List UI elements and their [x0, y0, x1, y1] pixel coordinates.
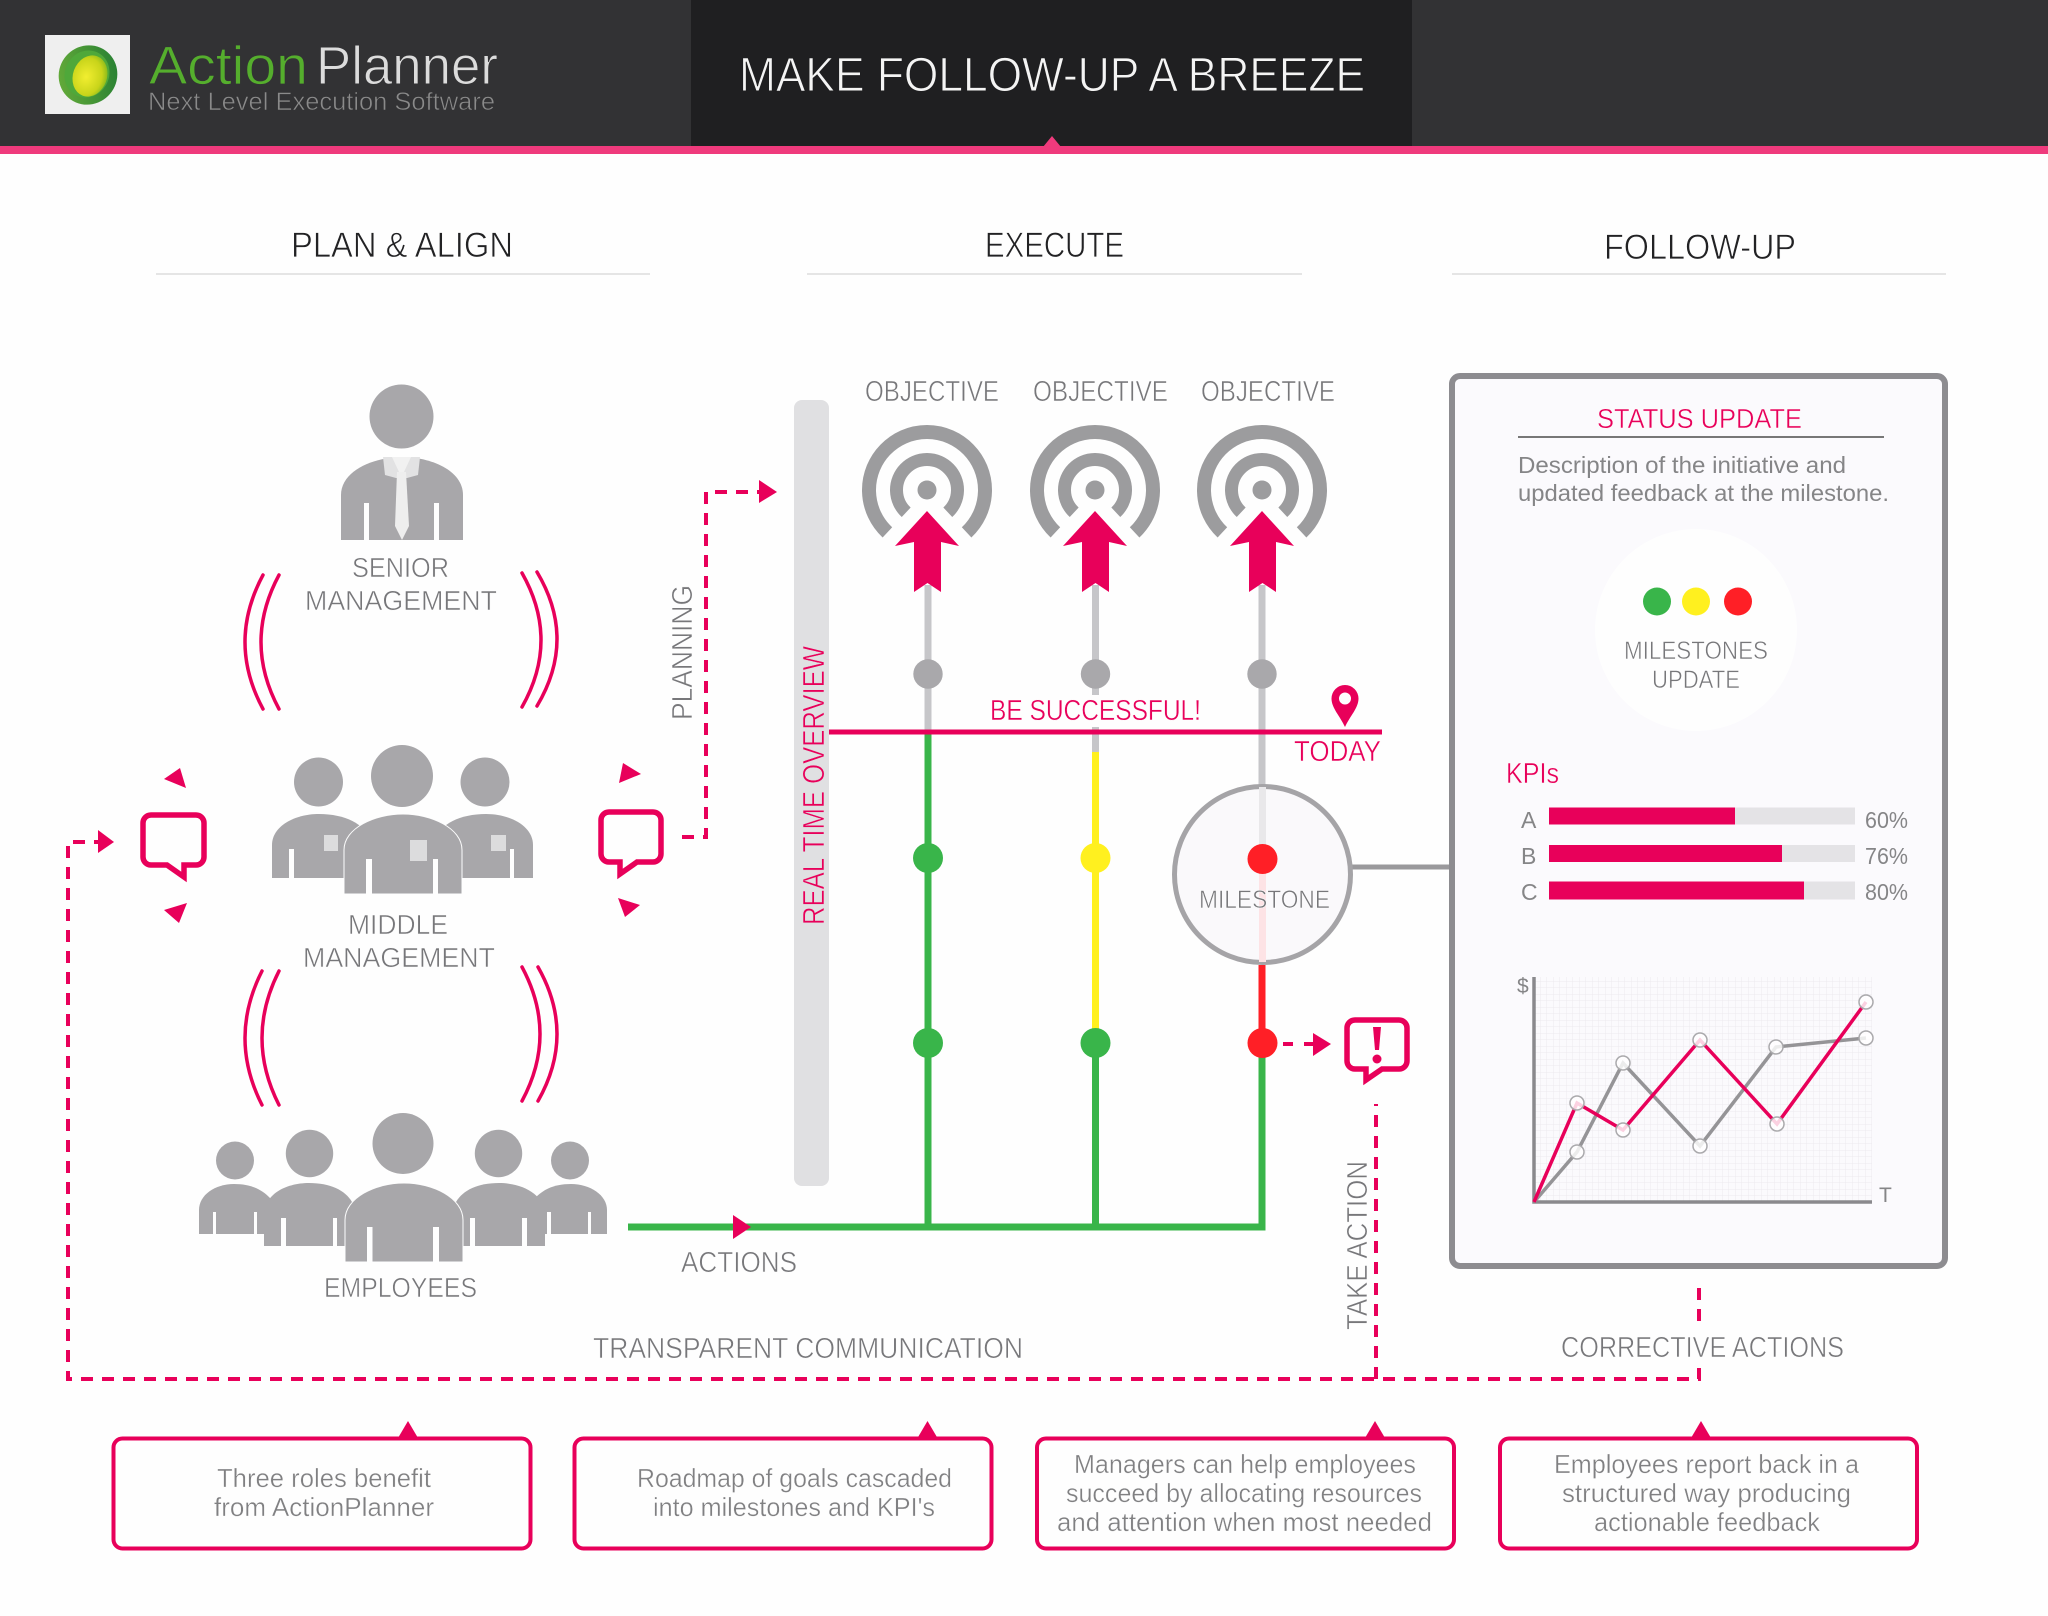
icon: employees group [199, 1113, 607, 1262]
heading: follow-up: FOLLOW-UP [1604, 228, 1796, 267]
icon: middle management group [272, 745, 533, 894]
callout: employees report: actionable feedback [1594, 1507, 1821, 1537]
status description [1518, 452, 1889, 506]
label: corrective actions: CORRECTIVE ACTIONS [1561, 1332, 1844, 1364]
callout: employees report [1500, 1421, 1917, 1548]
icon: senior management person [341, 384, 463, 540]
callout: three roles: from ActionPlanner [214, 1492, 434, 1522]
label: take action: TAKE ACTION [1342, 1161, 1374, 1330]
label: milestone: MILESTONE [1199, 886, 1330, 914]
brackets: middle to employees [245, 967, 557, 1105]
callout: roadmap: Roadmap of goals cascaded [637, 1463, 952, 1493]
label: senior management: MANAGEMENT [305, 585, 497, 616]
callout: three roles: Three roles benefit [217, 1463, 432, 1493]
status description: Description of the initiative and [1518, 452, 1846, 478]
callout: employees report: Employees report back in a [1554, 1449, 1860, 1479]
status description: updated feedback at the milestone. [1518, 480, 1889, 506]
label: actions: ACTIONS [681, 1247, 797, 1279]
track: objective 2 green [1092, 1042, 1099, 1230]
label: employees: EMPLOYEES [324, 1272, 477, 1303]
callout: managers: Managers can help employees [1074, 1449, 1416, 1479]
track: objective 2 yellow [1092, 752, 1099, 1042]
callout: managers: succeed by allocating resources [1066, 1478, 1422, 1508]
label: planning: PLANNING [667, 585, 699, 720]
KPI bar chart: C [1521, 879, 1538, 905]
arrow: transparent communication dashed loop [68, 830, 1699, 1379]
milestone circle [1174, 786, 1350, 962]
logo tagline: Next Level Execution Software [148, 88, 495, 116]
horizontal actions line [628, 1224, 1266, 1230]
milestones update badge: MILESTONES [1624, 637, 1768, 665]
line chart: T [1879, 1184, 1892, 1207]
callout: roadmap: into milestones and KPI's [653, 1492, 935, 1522]
label: be successful: BE SUCCESSFUL! [990, 695, 1201, 727]
label: middle management: MIDDLE [348, 909, 448, 940]
callout: managers [1037, 1421, 1454, 1548]
connector: milestone to status panel [1350, 864, 1452, 870]
arrow: planning dashed connector [682, 480, 777, 837]
logo wordmark second part: Planner [316, 36, 498, 96]
icon: target 2 [1037, 432, 1153, 592]
objective stems [924, 585, 1266, 785]
label: real time overview: REAL TIME OVERVIEW [796, 645, 831, 925]
KPI bar chart: A [1521, 807, 1537, 833]
header pointer [1043, 136, 1061, 147]
icon: target 1 [869, 432, 985, 592]
track: objective 1 green [924, 734, 932, 1230]
icon: today pin [1332, 685, 1358, 727]
callout: employees report: structured way producing [1562, 1478, 1851, 1508]
arrow: objective 2 [1063, 511, 1127, 592]
KPI bar chart: 76% [1865, 843, 1908, 869]
status update heading: STATUS UPDATE [1597, 403, 1802, 434]
line chart: $ [1517, 975, 1529, 998]
label: objectives [865, 376, 1335, 408]
KPI bar chart [1521, 807, 1908, 905]
arrow: objective 1 [895, 511, 959, 592]
track: objective 3 green [1258, 1050, 1266, 1230]
line chart [1517, 975, 1892, 1207]
arrow: take action dashed line [1374, 1104, 1378, 1379]
logo wordmark: Action [149, 36, 308, 96]
header bar [0, 0, 2048, 154]
label: senior management: SENIOR [352, 552, 449, 583]
icon: left speech bubble with arrows [143, 768, 204, 923]
label: transparent communication: TRANSPARENT COMMUNICATION [593, 1333, 1023, 1365]
arrow: objective 3 [1230, 511, 1294, 592]
label: today: TODAY [1294, 736, 1381, 768]
arrow: dashed to alert [1283, 1033, 1331, 1056]
label: middle management: MANAGEMENT [303, 942, 495, 973]
label: objectives: OBJECTIVE [865, 376, 999, 408]
heading: plan and align: PLAN & ALIGN [291, 226, 513, 265]
icon: alert speech bubble [1347, 1020, 1407, 1080]
milestones update badge [1595, 529, 1797, 731]
KPI bar chart: 60% [1865, 807, 1908, 833]
status dots [913, 843, 1110, 1058]
panel: real time overview bar [794, 400, 831, 1186]
green actions line and status tracks [628, 734, 1266, 1239]
logo [45, 34, 498, 116]
milestones update badge: UPDATE [1652, 666, 1740, 694]
brackets: senior to middle [245, 572, 557, 709]
arrow: corrective actions dashed stub [1697, 1288, 1701, 1325]
logo icon [45, 34, 130, 116]
title: MAKE FOLLOW-UP A BREEZE [739, 49, 1365, 102]
icon: right speech bubble with arrows [601, 763, 661, 917]
arrow: actions direction [733, 1215, 751, 1239]
KPI bar chart: B [1521, 843, 1536, 869]
today line [829, 730, 1382, 734]
KPI bar chart: 80% [1865, 879, 1908, 905]
red milestone dot lower [1248, 1028, 1278, 1058]
heading: execute: EXECUTE [985, 226, 1124, 265]
KPIs heading: KPIs [1506, 758, 1559, 790]
track: objective 3 red [1258, 965, 1266, 1043]
header center panel [691, 0, 1412, 147]
pink header rule [0, 146, 2048, 154]
panel: status update [1452, 376, 1945, 1266]
icon: target 3 [1204, 432, 1320, 592]
label: senior management [305, 552, 497, 616]
callout: roadmap [574, 1421, 992, 1548]
callout: managers: and attention when most needed [1057, 1507, 1432, 1537]
label: middle management [303, 909, 495, 973]
callout: three roles [114, 1421, 530, 1548]
checkpoint dots [913, 659, 1277, 689]
label: objectives: OBJECTIVE [1033, 376, 1168, 408]
label: objectives: OBJECTIVE [1201, 376, 1335, 408]
